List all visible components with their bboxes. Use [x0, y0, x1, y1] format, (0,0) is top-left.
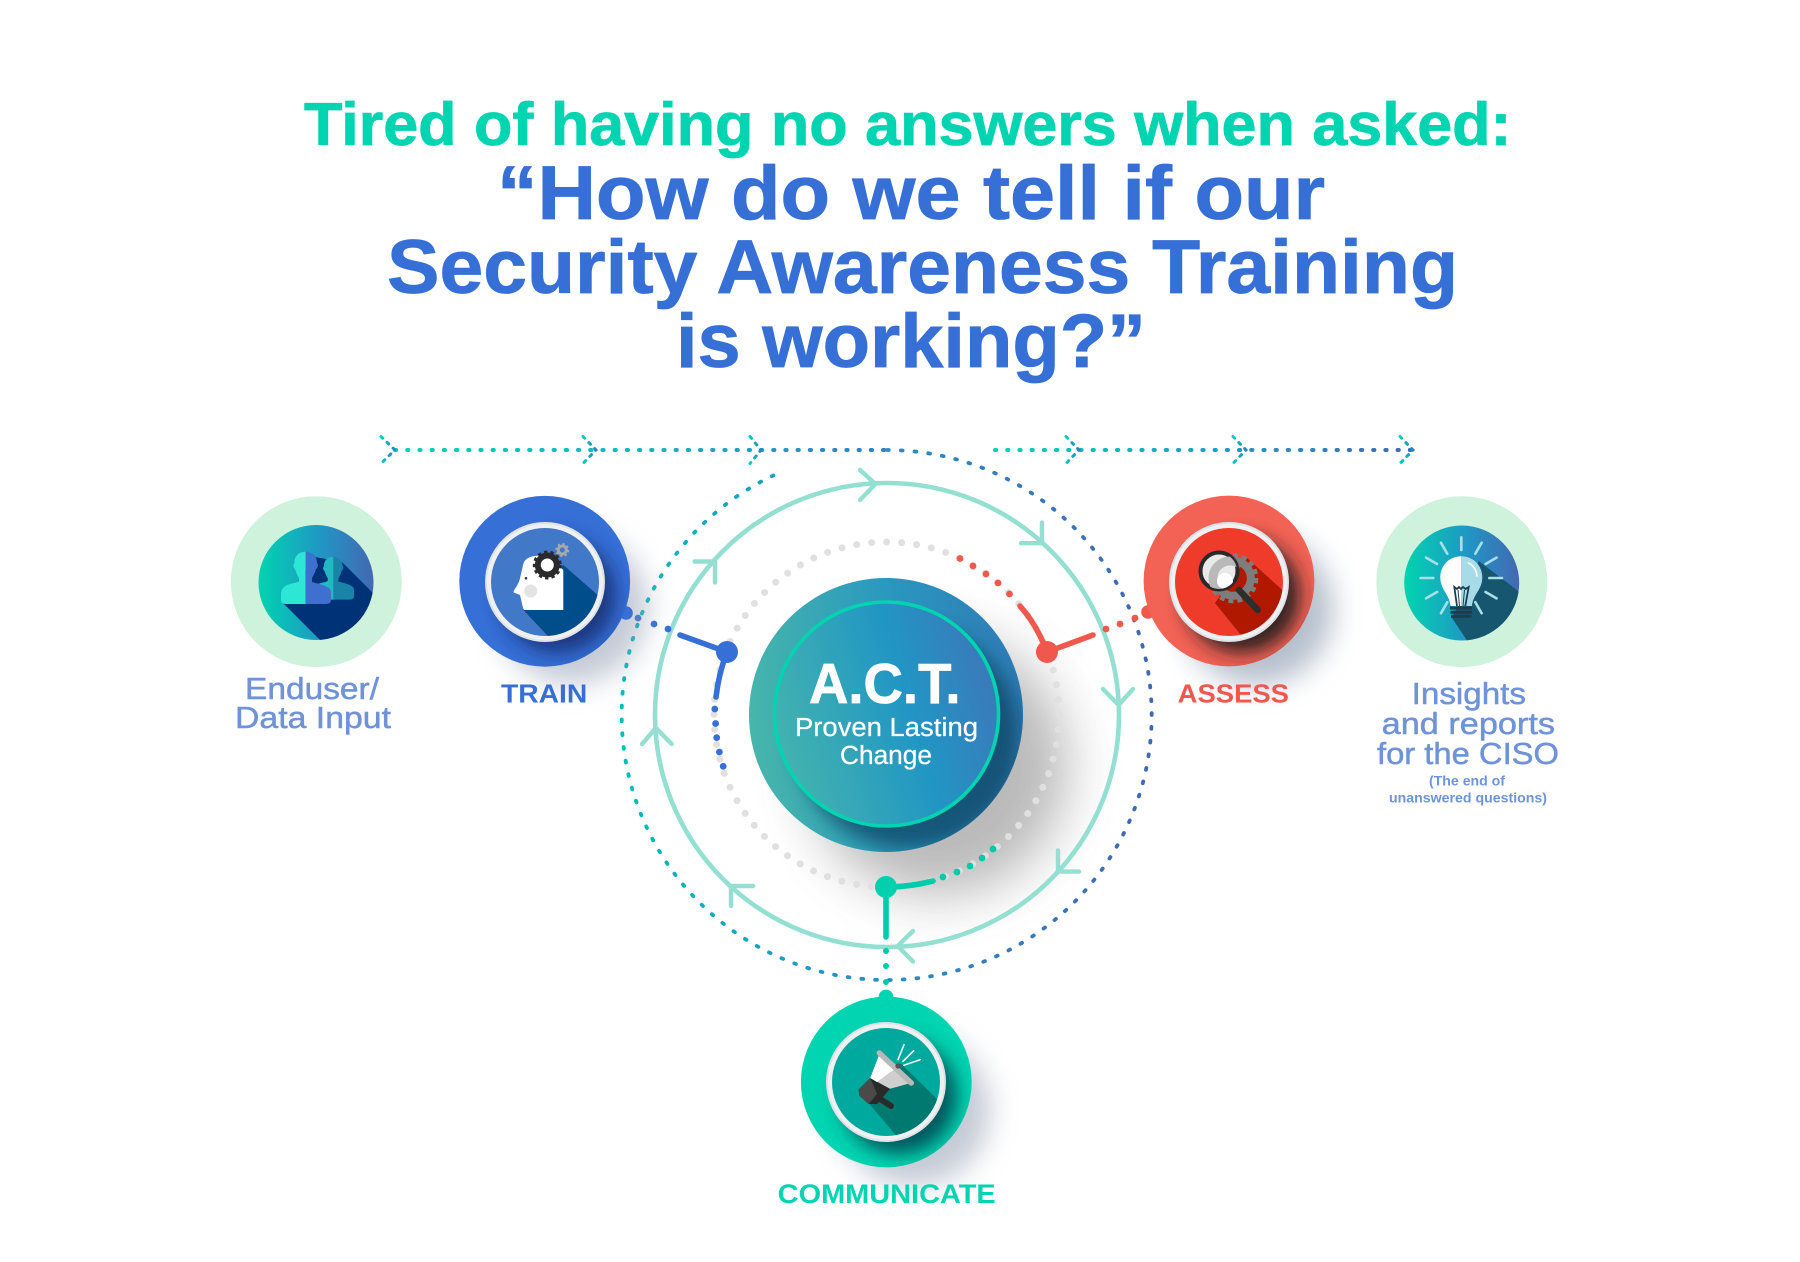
label: enduser: Data Input [235, 700, 391, 735]
label: insights: for the CISO [1377, 736, 1559, 771]
label note: (The end of [1429, 773, 1505, 789]
subtitle [795, 714, 978, 770]
label: insights: and reports [1382, 706, 1555, 741]
subtitle: Proven Lasting [795, 714, 978, 742]
connector: train [635, 615, 738, 770]
central disc drop shadow [808, 636, 1068, 896]
title line: question lead-in: Tired of having no answers when asked: [304, 91, 1512, 158]
subtitle: Change [840, 742, 932, 770]
label: train: TRAIN [501, 681, 587, 709]
grey dotted inner ring [714, 542, 1059, 887]
arrow: dotted timeline left [381, 436, 887, 464]
dotted outer ring [622, 450, 1152, 980]
label note [1389, 773, 1547, 806]
label: insights: Insights [1412, 676, 1526, 711]
label: enduser [235, 671, 391, 735]
title line: quote 1: “How do we tell if our [497, 151, 1325, 236]
icon: train [459, 496, 648, 684]
connector: assess [957, 555, 1138, 663]
A.C.T. heading: A.C.T. [809, 652, 960, 716]
mint cycle ring with arrows [642, 470, 1133, 962]
icon: insights lightbulb [1376, 496, 1547, 667]
connector: communicate [875, 846, 996, 985]
label: enduser: Enduser/ [245, 671, 379, 706]
icon: assess [1141, 496, 1333, 685]
title line: quote 2: Security Awareness Training [387, 225, 1458, 310]
label: assess: ASSESS [1178, 681, 1289, 709]
title [304, 91, 1512, 384]
arrow: dotted timeline right [995, 436, 1413, 464]
icon: communicate megaphone [801, 990, 990, 1186]
title line: quote 3: is working?” [676, 299, 1146, 384]
central A.C.T. disc [749, 578, 1023, 852]
label: communicate: COMMUNICATE [778, 1179, 996, 1209]
icon: enduser data input [231, 496, 402, 667]
label note: unanswered questions) [1389, 790, 1547, 806]
label: insights [1377, 676, 1559, 806]
